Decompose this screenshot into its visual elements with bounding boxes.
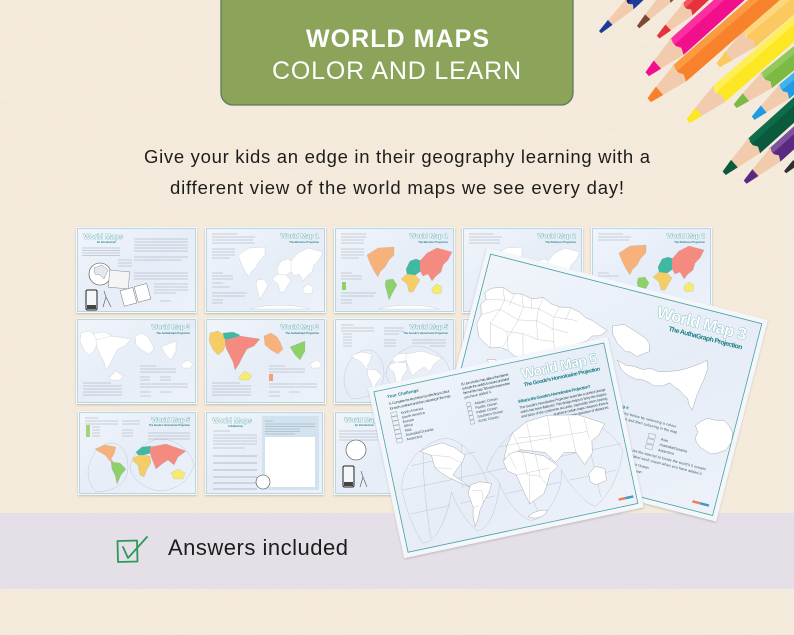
text: projection explainer: What is the Goode's Homolosine Projection? bbox=[518, 384, 591, 404]
title: world map 3: World Map 3 bbox=[655, 304, 749, 344]
checkbox list: continents: Antarctica bbox=[658, 448, 674, 456]
checkbox list: continents: North America bbox=[401, 407, 424, 415]
text: ocean instructions: and label each ocean when you have added it. bbox=[625, 452, 703, 476]
text: ocean instructions: B. Use the internet to locate the world's 5 oceans bbox=[626, 447, 707, 471]
text: ocean instructions bbox=[461, 373, 512, 400]
intro text block bbox=[144, 146, 651, 198]
thumbnail: world map 3 answers bbox=[205, 318, 326, 404]
subtitle: goode's homolosine: The Goode's Homolosine Projection bbox=[523, 366, 601, 388]
map: authagraph projection bbox=[459, 283, 755, 458]
header panel bbox=[221, 0, 573, 105]
logo bbox=[692, 500, 709, 507]
text: projection explainer: still some distortion of distances. bbox=[564, 405, 610, 419]
title: world map 5: World Map 5 bbox=[520, 350, 599, 382]
thumbnail: world map 3 blank: World Map 3 bbox=[151, 324, 190, 331]
thumbnail: world map 3 answers: World Map 3 bbox=[280, 324, 319, 331]
thumbnail: world map 2 blank bbox=[462, 227, 583, 313]
text: projection explainer bbox=[518, 381, 610, 428]
checkbox list: continents: Asia bbox=[404, 427, 412, 433]
checkbox list: continents: Asia bbox=[660, 437, 668, 443]
checkbox list: oceans: Indian Ocean bbox=[476, 406, 498, 414]
checkbox list: continents: Africa bbox=[403, 423, 413, 428]
text: ocean instructions: to locate the world's 5 oceans and label bbox=[462, 377, 510, 391]
thumbnail: world map 3 answers: The AuthaGraph Projection bbox=[285, 331, 319, 335]
thumbnail: introduction copy bbox=[334, 411, 453, 495]
thumbnail: introduction copy: An Introduction bbox=[355, 423, 374, 427]
worksheet: world map 5 bbox=[368, 337, 644, 558]
thumbnail: world map 5 blank: World Map 5 bbox=[409, 324, 448, 331]
checkbox list: continents: Australia/Oceania bbox=[405, 427, 434, 437]
thumbnail: world map 1 answers: The Mercator Projection bbox=[418, 240, 448, 244]
text: answers included: Answers included bbox=[168, 535, 348, 560]
checkbox list: oceans: Atlantic Ocean bbox=[474, 397, 498, 406]
thumbnail: introduction copy: World Maps bbox=[344, 417, 381, 424]
text: projection explainer: and sizes of the continents accurate, especially when looking bbox=[521, 396, 608, 419]
icon: green check box bbox=[118, 537, 147, 562]
heading: world maps: WORLD MAPS bbox=[306, 25, 489, 53]
text: key instructions: A. Complete the key below by selecting a colour bbox=[388, 389, 451, 406]
thumbnail: world map 1 blank: The Mercator Projection bbox=[289, 240, 319, 244]
thumbnail: world map 2 answers bbox=[591, 227, 712, 313]
thumbnail: world map 2 blank: The Robinson Projection bbox=[545, 240, 576, 244]
text: projection explainer: at areas in certain maps. However, there is bbox=[553, 401, 609, 416]
thumbnail: world map 3 blank: The AuthaGraph Projection bbox=[156, 331, 190, 335]
checkbox list: oceans: Southern Ocean bbox=[477, 409, 503, 419]
text: ocean instructions bbox=[621, 447, 707, 490]
checkbox list: continents: Australia/Oceania bbox=[659, 443, 688, 454]
thumbnail: reflection bbox=[205, 411, 324, 495]
thumbnail: world map 5 blank: The Goode's Homolosine Projection bbox=[403, 331, 448, 335]
panel: worksheet thumbnails bbox=[76, 227, 712, 495]
thumbnail: world map 1 blank bbox=[205, 227, 326, 313]
thumbnail: world map 5 answers: World Map 5 bbox=[151, 417, 190, 424]
checkbox list: continents bbox=[645, 433, 689, 459]
text: ocean instructions: them in the map. Tick each ocean when bbox=[463, 381, 511, 395]
thumbnail: hidden sheet bbox=[462, 318, 583, 404]
text: challenge heading: Your Challenge bbox=[583, 394, 630, 410]
thumbnail: introduction bbox=[76, 227, 197, 313]
thumbnail: world map 5 answers: The Goode's Homolosine Projection bbox=[149, 424, 191, 427]
thumbnail: reflection: World Maps bbox=[212, 418, 252, 425]
map: goode's homolosine bbox=[393, 402, 633, 545]
thumbnail: introduction: World Maps bbox=[83, 234, 123, 241]
thumbnail: world map 3 blank bbox=[76, 318, 197, 404]
text: ocean instructions: B. Use a book, map, atlas or the internet bbox=[461, 373, 509, 386]
intro text block: different view of the world maps we see every day! bbox=[170, 177, 624, 198]
text: your challenge: Your Challenge bbox=[387, 387, 420, 399]
thumbnail: world map 2 answers: The Robinson Projection bbox=[674, 240, 705, 244]
checkbox list: continents: South America bbox=[401, 411, 425, 420]
text: projection explainer: which has been flattened. This design helps to keep the shapes bbox=[520, 392, 607, 414]
thumbnail: world map 1 answers: World Map 1 bbox=[409, 233, 448, 240]
worksheet: world map 3 bbox=[435, 248, 768, 522]
text: ocean instructions: Southern Ocean bbox=[623, 460, 649, 470]
thumbnail: world map 1 answers bbox=[334, 227, 455, 313]
subtitle: authagraph: The AuthaGraph Projection bbox=[668, 326, 743, 351]
checkbox list: oceans: Arctic Ocean bbox=[478, 415, 499, 423]
thumbnail: reflection: A Reflection bbox=[228, 424, 243, 428]
thumbnail: world map 1 blank: World Map 1 bbox=[280, 233, 319, 240]
thumbnail: introduction: An Introduction bbox=[97, 240, 116, 244]
logo bbox=[618, 495, 634, 501]
thumbnail: world map 5 answers bbox=[78, 411, 197, 495]
checkbox list: oceans bbox=[466, 396, 504, 425]
text: projection explainer: The Goode's Homolosine Projection looks like a peeled orange bbox=[519, 388, 606, 410]
checkbox list: continents: Antarctica bbox=[406, 434, 423, 442]
text: key instructions: for each continent and then colouring in the map bbox=[389, 394, 451, 411]
thumbnail: world map 5 blank bbox=[334, 318, 455, 404]
text: ocean instructions: Arctic Ocean bbox=[621, 465, 642, 474]
text: ocean instructions: you have added it. bbox=[464, 390, 492, 400]
checkbox list: oceans: Pacific Ocean bbox=[475, 402, 498, 410]
thumbnail: world map 2 answers: World Map 2 bbox=[666, 233, 705, 240]
checkbox list: continents: Europe bbox=[402, 418, 415, 424]
intro text block: Give your kids an edge in their geography learning with a bbox=[144, 146, 651, 167]
heading: color and learn: COLOR AND LEARN bbox=[272, 57, 521, 85]
lavender band: answers bbox=[0, 513, 794, 589]
thumbnail: world map 2 blank: World Map 2 bbox=[537, 233, 576, 240]
text: challenge instructions: A. Colour the key below by selecting a colour bbox=[599, 405, 678, 429]
icon: coloured pencils bbox=[596, 0, 794, 188]
text: challenge instructions: for each continent and then colouring in the map bbox=[597, 410, 678, 435]
checkbox list: continents bbox=[391, 405, 435, 444]
